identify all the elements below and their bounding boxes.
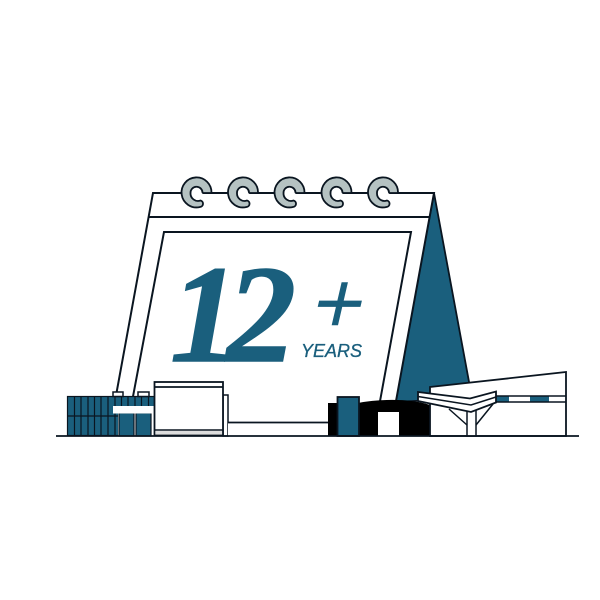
years label: YEARS	[301, 341, 362, 361]
calendar back stand	[395, 193, 472, 402]
ground line	[56, 435, 579, 437]
spiral rings	[182, 177, 398, 207]
white block building	[154, 382, 228, 436]
low wall	[228, 422, 329, 436]
black arena building	[328, 397, 430, 436]
plus sign: +	[303, 253, 377, 352]
terminal building with canopy	[418, 372, 566, 436]
calendar page	[111, 193, 434, 423]
number 12: 12	[170, 238, 296, 392]
container block building	[67, 392, 156, 436]
